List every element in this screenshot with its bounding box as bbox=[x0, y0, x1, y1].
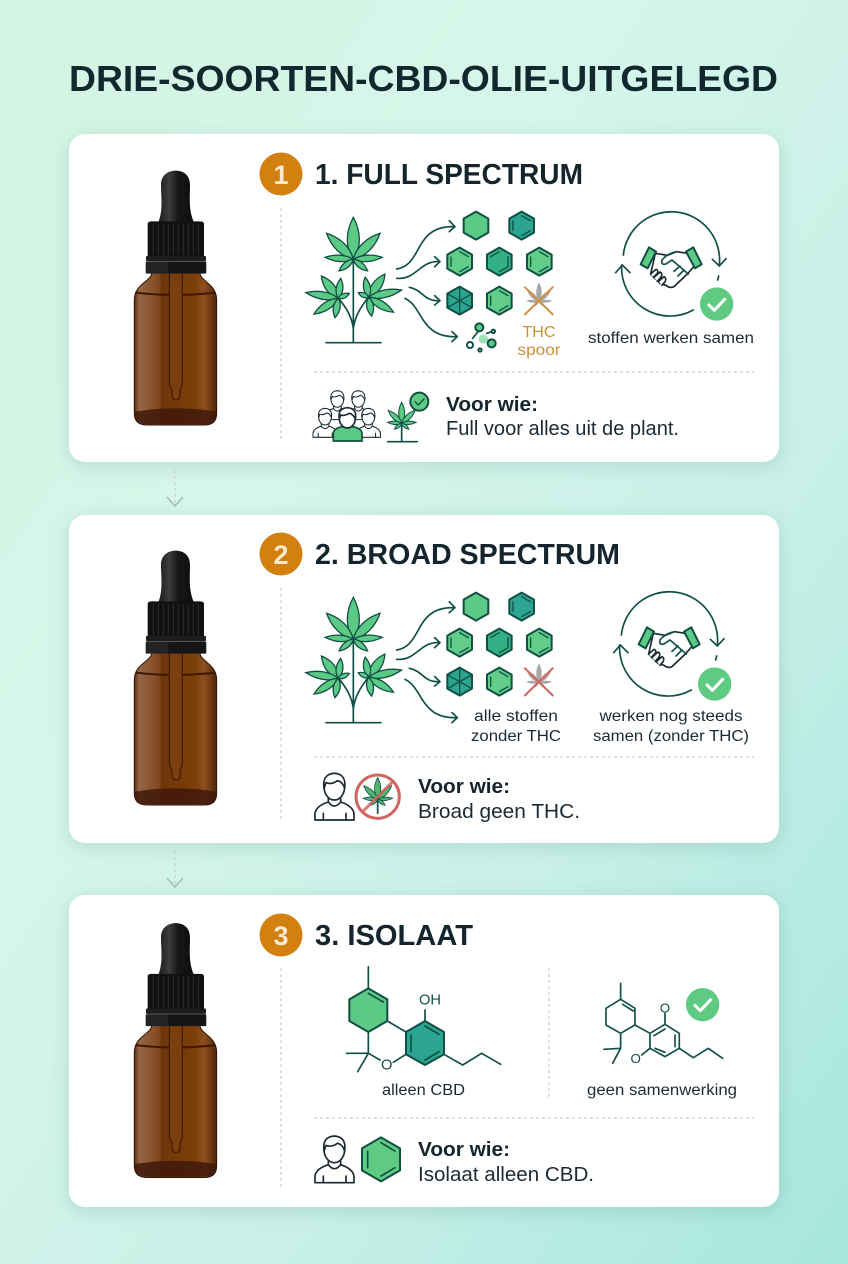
heading: broad spectrum: 2. BROAD SPECTRUM bbox=[315, 539, 620, 571]
number badge 1 bbox=[260, 152, 302, 196]
molecule: CBD outline with check bbox=[604, 983, 723, 1066]
arrow: card 1 to card 2 bbox=[167, 470, 183, 506]
text: voor wie isolaat: Voor wie: bbox=[418, 1139, 510, 1161]
panel: broad spectrum bbox=[69, 515, 779, 843]
title: DRIE-SOORTEN-CBD-OLIE-UITGELEGD bbox=[69, 58, 778, 99]
caption: alle stoffen zonder THC bbox=[471, 708, 561, 745]
panel: full spectrum bbox=[69, 134, 779, 462]
bottle: broad spectrum bbox=[134, 551, 217, 805]
text: voor wie full: Full voor alles uit de plant. bbox=[446, 418, 679, 440]
caption: werken nog steeds samen: werken nog steeds bbox=[598, 708, 743, 725]
number badge 3 bbox=[260, 914, 302, 956]
molecule: CBD coloured bbox=[347, 967, 501, 1074]
text: voor wie isolaat bbox=[418, 1139, 594, 1186]
text: voor wie isolaat: Isolaat alleen CBD. bbox=[418, 1164, 594, 1186]
bottle: isolaat bbox=[134, 923, 217, 1177]
caption: alle stoffen zonder THC: alle stoffen bbox=[474, 708, 558, 725]
heading: isolaat: 3. ISOLAAT bbox=[315, 920, 473, 952]
number badge 3: 3 bbox=[273, 921, 289, 951]
caption: werken nog steeds samen bbox=[593, 708, 749, 745]
text: voor wie broad: Voor wie: bbox=[418, 776, 510, 798]
number badge 2 bbox=[260, 532, 302, 576]
icon: people and plant bbox=[313, 391, 428, 442]
text: voor wie broad: Broad geen THC. bbox=[418, 801, 580, 823]
bottle: full spectrum bbox=[134, 171, 217, 425]
panel: isolaat bbox=[69, 895, 779, 1207]
text: voor wie full: Voor wie: bbox=[446, 394, 538, 416]
icon: handshake cycle bbox=[614, 592, 731, 701]
icon: handshake cycle bbox=[616, 212, 733, 321]
arrow: card 2 to card 3 bbox=[167, 851, 183, 887]
label: THC spoor: spoor bbox=[518, 342, 561, 359]
molecule: CBD outline with check: O bbox=[630, 1051, 641, 1066]
molecule: CBD outline with check: O bbox=[660, 1000, 670, 1015]
caption: geen samenwerking: geen samenwerking bbox=[587, 1082, 737, 1099]
text: voor wie full bbox=[446, 394, 679, 440]
number badge 2: 2 bbox=[273, 540, 289, 570]
caption: alleen CBD: alleen CBD bbox=[382, 1082, 465, 1099]
icon: person and hexagon bbox=[315, 1136, 400, 1183]
plant with compounds diagram bbox=[305, 593, 553, 723]
caption: stoffen werken samen: stoffen werken samen bbox=[588, 330, 754, 347]
heading: full spectrum: 1. FULL SPECTRUM bbox=[315, 159, 583, 191]
number badge 1: 1 bbox=[273, 160, 289, 190]
molecule: CBD coloured: O bbox=[381, 1058, 392, 1074]
caption: werken nog steeds samen: samen (zonder THC) bbox=[593, 728, 749, 745]
icon: person and no-THC sign bbox=[315, 773, 399, 820]
label: THC spoor: THC bbox=[522, 324, 556, 341]
text: voor wie broad bbox=[418, 776, 580, 823]
label: THC spoor bbox=[518, 324, 561, 359]
caption: alle stoffen zonder THC: zonder THC bbox=[471, 728, 561, 745]
molecule: CBD coloured: OH bbox=[419, 992, 441, 1008]
plant with compounds diagram bbox=[305, 212, 553, 352]
